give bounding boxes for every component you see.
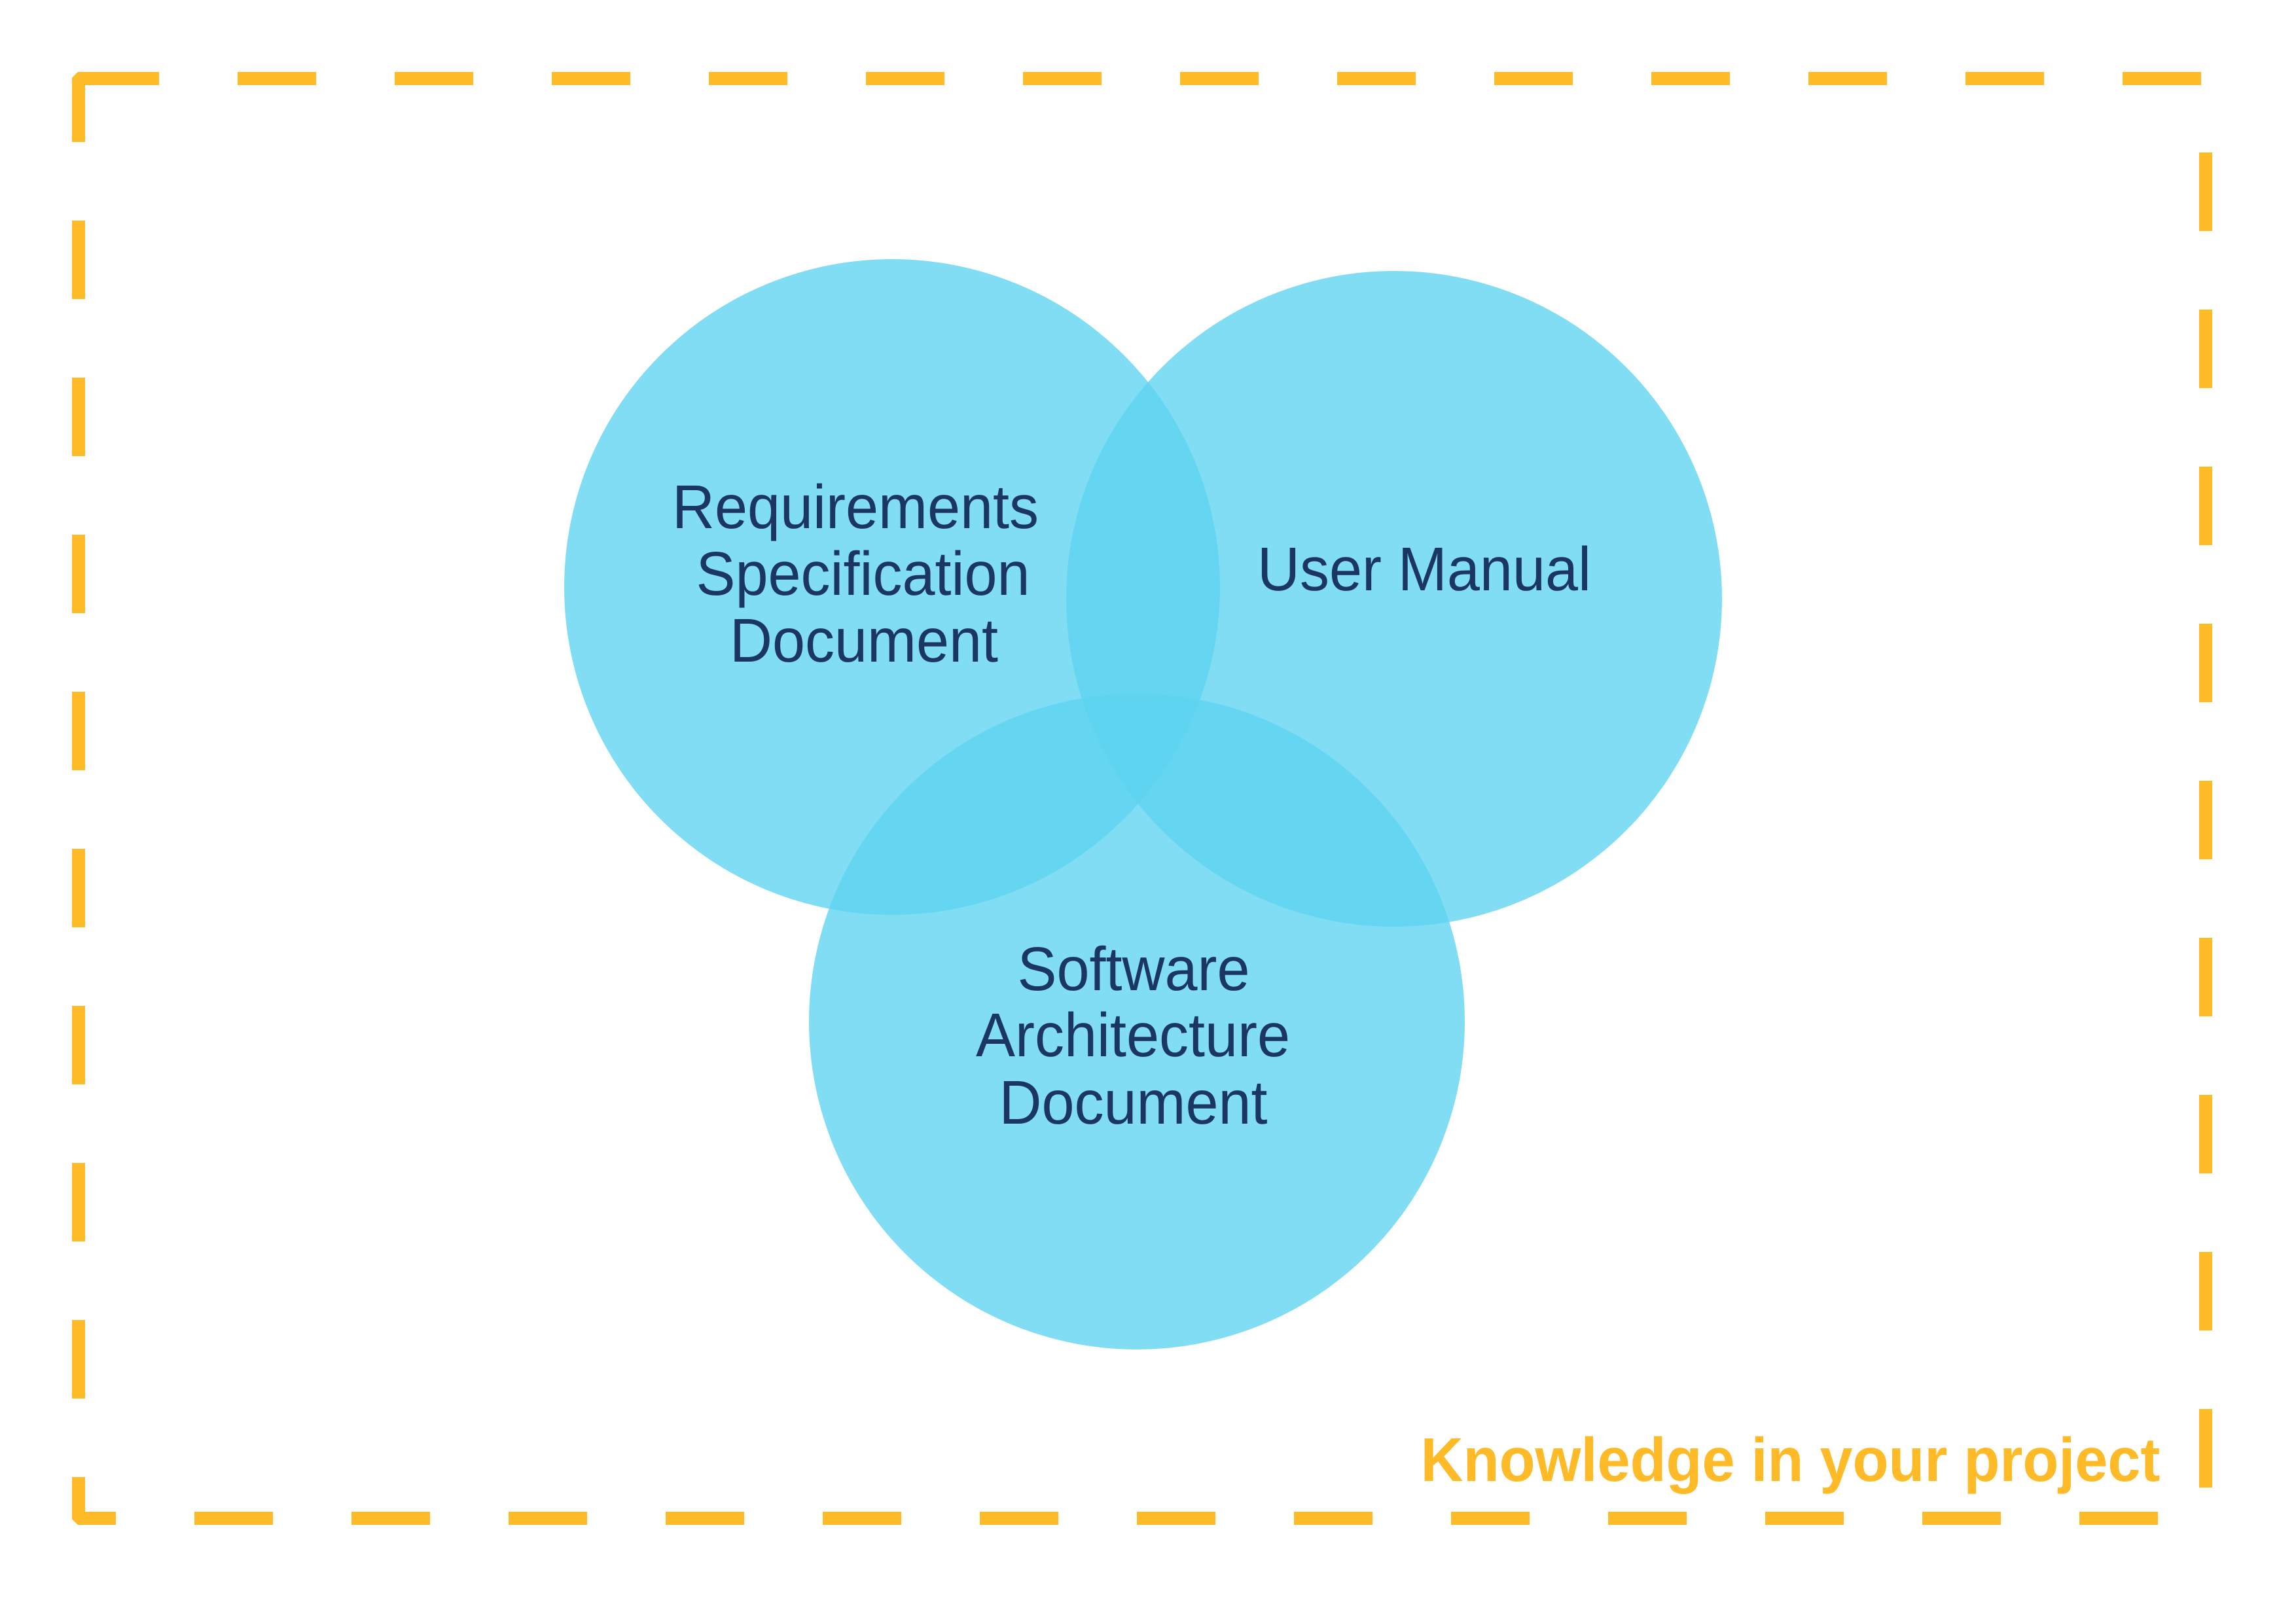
label: requirements specification document: Specification <box>696 539 1030 609</box>
label: software architecture document <box>976 935 1290 1137</box>
circle: user manual <box>1066 271 1722 927</box>
label: requirements specification document <box>672 473 1039 675</box>
venn diagram <box>564 259 1722 1349</box>
circle: software architecture document <box>809 694 1465 1349</box>
label: software architecture document: Software <box>1017 935 1250 1004</box>
label: software architecture document: Document <box>999 1068 1268 1137</box>
label: requirements specification document: Requirements <box>672 473 1039 542</box>
caption: knowledge in your project: Knowledge in your project <box>1421 1425 2160 1495</box>
label: requirements specification document: Document <box>730 606 998 675</box>
label: user manual: User Manual <box>1257 535 1591 604</box>
label: software architecture document: Architecture <box>976 1001 1290 1070</box>
circle: requirements specification document <box>564 259 1220 915</box>
